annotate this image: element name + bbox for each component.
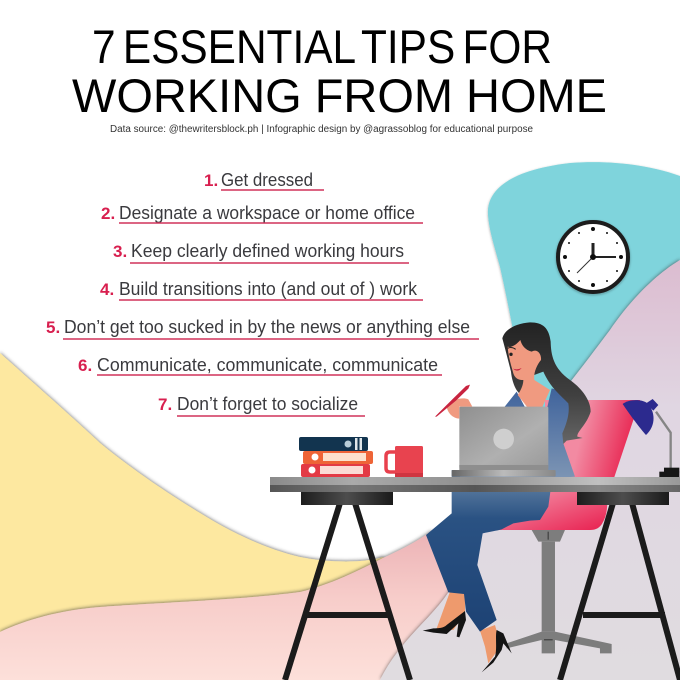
tip 7: 7.	[158, 395, 172, 414]
hair	[502, 322, 591, 444]
upper body	[460, 388, 575, 478]
head	[502, 322, 591, 444]
data source line: Data source: @thewritersblock.ph | Infographic design by @agrassoblog for educational purpose	[110, 124, 533, 135]
chair seat	[495, 490, 607, 530]
tip 5: Don’t get too sucked in by the news or anything else	[64, 317, 470, 337]
background: lilac shape	[380, 260, 680, 680]
icon: wall clock	[558, 222, 628, 292]
mouth	[513, 368, 522, 371]
tip 7: Don’t forget to socialize	[177, 394, 358, 414]
books stack	[299, 437, 373, 477]
tip 6: 6.	[78, 356, 92, 375]
tip 1: Get dressed	[221, 170, 313, 190]
face and neck	[508, 340, 550, 408]
tip 5: 5.	[46, 318, 60, 337]
left trestle legs	[285, 503, 410, 680]
eyebrow	[508, 348, 516, 349]
hand	[447, 398, 472, 419]
tips list	[46, 170, 479, 416]
laptop	[452, 407, 556, 477]
chair base	[507, 530, 612, 653]
chair	[495, 400, 640, 653]
tip 1: 1.	[204, 171, 218, 190]
legs and shoes	[423, 470, 553, 672]
ankle and front shoe	[480, 625, 512, 672]
eye	[509, 353, 513, 356]
trousers	[426, 470, 553, 632]
coffee mug	[386, 446, 423, 477]
tip 2: 2.	[101, 204, 115, 223]
desk lamp	[623, 399, 679, 477]
tip 4: 4.	[100, 280, 114, 299]
ankle and back shoe	[423, 592, 466, 637]
chair back	[545, 400, 640, 478]
background: yellow wave	[0, 353, 400, 680]
laptop and hand	[435, 385, 556, 477]
title: WORKING FROM HOME	[72, 69, 607, 122]
tip 3: Keep clearly defined working hours	[131, 241, 404, 261]
background: teal blob	[488, 162, 680, 420]
tip 3: 3.	[113, 242, 127, 261]
left bracket	[301, 491, 393, 505]
title	[72, 20, 607, 122]
tip 4: Build transitions into (and out of ) work	[119, 279, 418, 299]
right trestle legs	[560, 503, 680, 680]
title: 7 ESSENTIAL TIPS FOR	[92, 20, 552, 73]
woman	[423, 322, 591, 672]
tip 6: Communicate, communicate, communicate	[97, 355, 438, 375]
desk top	[270, 477, 680, 492]
pen	[435, 385, 470, 417]
shirt	[460, 388, 575, 478]
background: pink wave	[0, 532, 520, 680]
desk	[270, 477, 680, 680]
right bracket	[577, 491, 669, 505]
tip 2: Designate a workspace or home office	[119, 203, 415, 223]
